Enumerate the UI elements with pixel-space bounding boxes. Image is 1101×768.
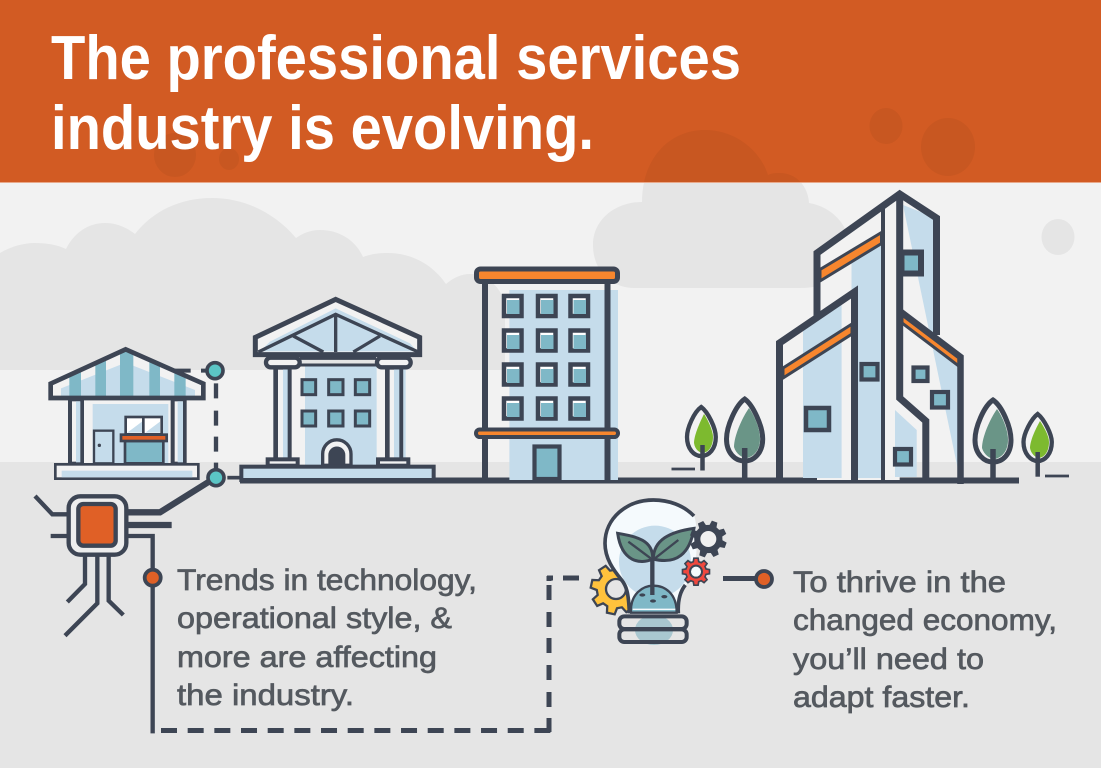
ground line: [240, 478, 1019, 484]
icon: microchip: [35, 496, 126, 636]
tree: small green left: [672, 407, 716, 470]
gear: red: [682, 558, 710, 585]
text block: adapt: you’ll need to: [793, 643, 984, 676]
icon: lightbulb with plant and gears: [586, 500, 732, 645]
text block: trends: [177, 564, 477, 712]
text block: adapt: [793, 566, 1057, 714]
text block: adapt: adapt faster.: [793, 681, 970, 714]
text block: trends: more are affecting: [177, 641, 437, 674]
trees: [672, 399, 1069, 480]
node: orange marker right: [756, 571, 772, 587]
tree: teal left: [726, 399, 763, 480]
gear: yellow: [586, 559, 646, 619]
connector: bulb to caption: [723, 571, 772, 587]
connector: circuit dashes and nodes: [128, 363, 242, 733]
banner cloud silhouette: [154, 108, 975, 182]
text block: adapt: changed economy,: [793, 604, 1057, 637]
bulb base: [619, 615, 687, 645]
roof bar: [476, 269, 618, 282]
node: lower teal: [208, 470, 224, 486]
mid bar: [476, 430, 618, 437]
background clouds: [0, 130, 1074, 370]
building: angular skyscraper: [780, 193, 960, 484]
soil dome: [631, 586, 677, 613]
bulb glass: [605, 500, 697, 613]
text block: trends: Trends in technology,: [177, 564, 477, 597]
title: [51, 24, 741, 163]
tree: small green right: [1024, 414, 1069, 477]
dashed connector to bulb: [161, 576, 579, 732]
building: shop: [50, 348, 204, 479]
door: [534, 446, 560, 479]
text block: trends: operational style, &: [177, 602, 452, 635]
building: columned institution: [241, 298, 434, 480]
text block: trends: the industry.: [177, 679, 354, 712]
building: office tower: [476, 269, 618, 480]
plant leaves: [618, 528, 694, 595]
node: upper teal: [207, 363, 223, 379]
header banner: [0, 0, 1101, 183]
node: orange marker left: [145, 570, 161, 586]
gear: dark: [685, 515, 732, 563]
title: The professional services: [51, 24, 741, 93]
title: industry is evolving.: [51, 94, 594, 163]
tree: teal right: [975, 400, 1011, 480]
text block: adapt: To thrive in the: [793, 566, 1006, 599]
skyscraper windows: [806, 252, 948, 464]
windows grid: [504, 296, 588, 418]
orange bands: [783, 232, 960, 378]
